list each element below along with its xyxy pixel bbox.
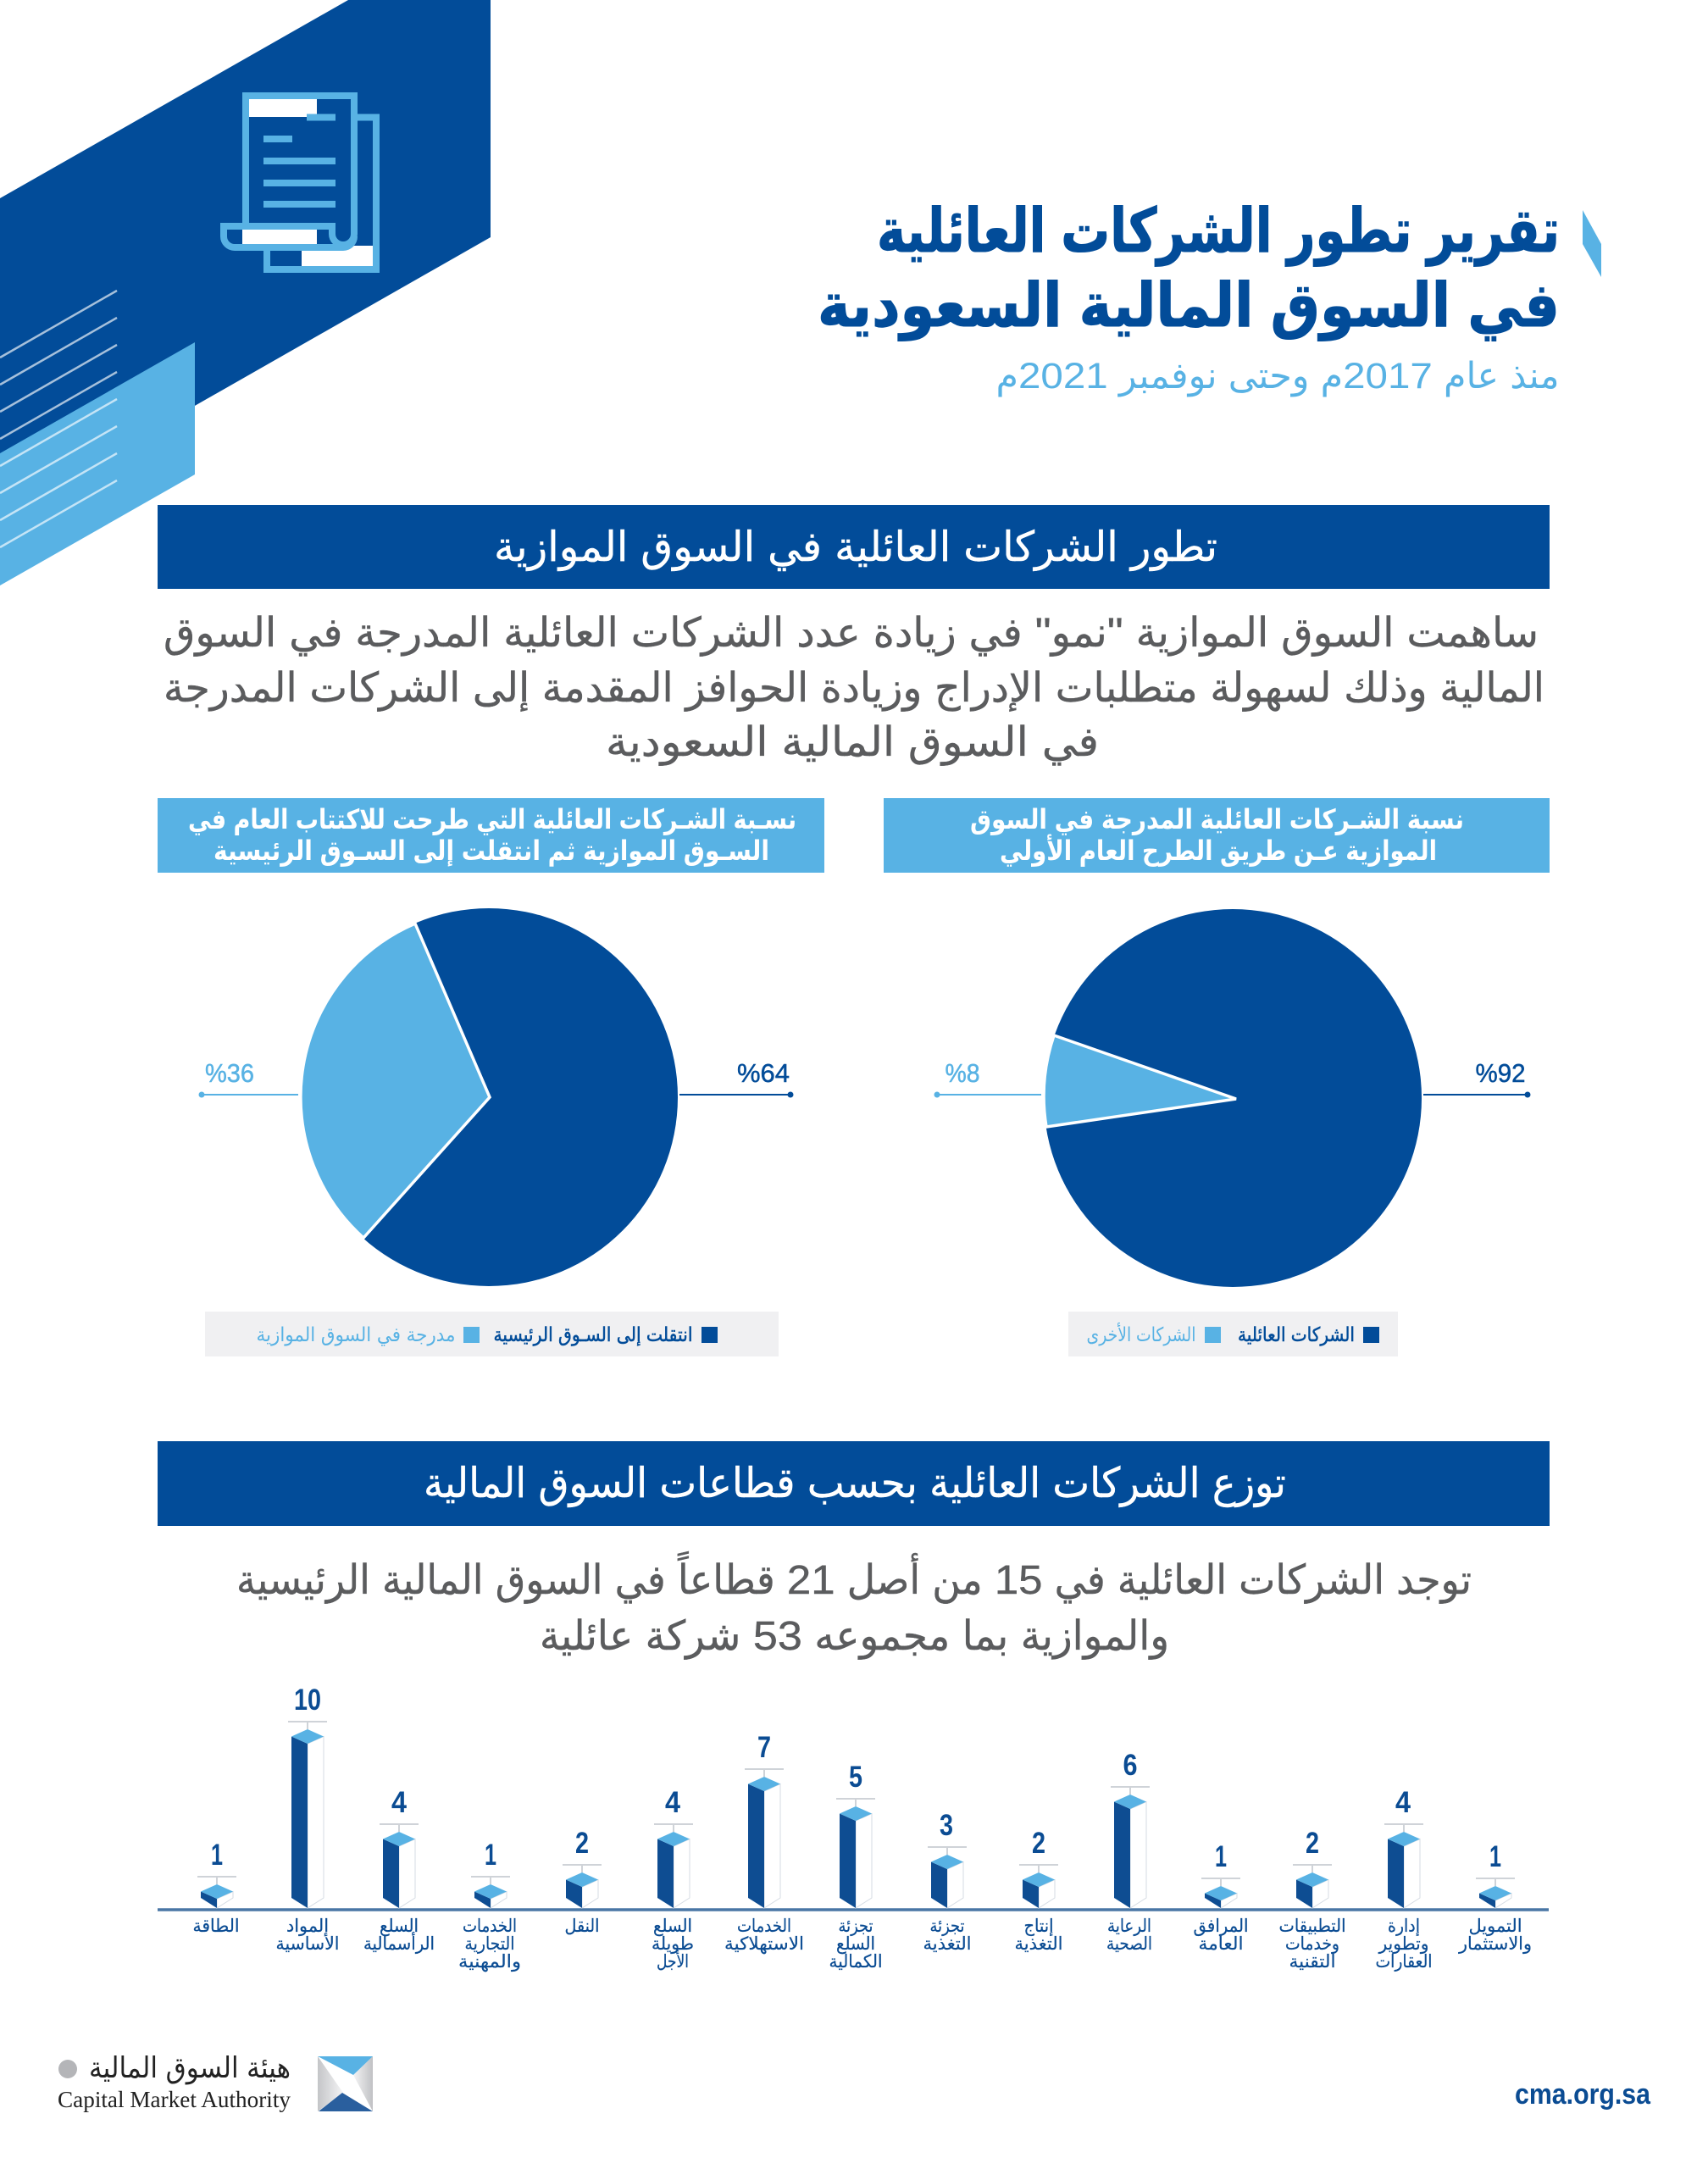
bar: food retail 3 <box>923 1809 971 1954</box>
intro paragraph: ساهمت السوق الموازية "نمو" في زيادة عدد الشركات العائلية المدرجة في السوق <box>164 611 1539 657</box>
bar: real estate 4: 4 <box>1395 1786 1411 1819</box>
sector paragraph <box>236 1550 1472 1660</box>
logo: Capital Market Authority: هيئة السوق المالية <box>89 2052 291 2085</box>
title: تقرير تطور الشركات العائلية <box>877 197 1560 267</box>
bar: food retail 3: التغذية <box>923 1934 971 1954</box>
bar: consumer services 7: الخدمات <box>737 1917 791 1936</box>
title accent <box>1583 210 1601 277</box>
label: 92 percent: %92 <box>1476 1058 1525 1088</box>
panel heading: moved to main market <box>158 798 824 873</box>
label: 36 percent <box>198 1058 298 1098</box>
sector paragraph: توجد الشركات العائلية في 15 من أصل 21 قطاعاً في السوق المالية الرئيسية <box>236 1550 1472 1604</box>
bar: materials 10: الأساسية <box>276 1933 339 1954</box>
bar: durable goods 4 <box>652 1786 694 1972</box>
section header: sectors: توزع الشركات العائلية بحسب قطاعات السوق المالية <box>424 1461 1286 1507</box>
bar: capital goods 4 <box>363 1786 435 1954</box>
intro paragraph: المالية وذلك لسهولة متطلبات الإدراج وزيادة الحوافز المقدمة إلى الشركات المدرجة <box>164 666 1544 712</box>
bar: software 2 <box>1279 1827 1345 1972</box>
logo: Capital Market Authority <box>58 2052 373 2112</box>
intro paragraph <box>164 611 1544 766</box>
decorative banner with document icon <box>0 0 491 585</box>
bar: real estate 4: العقارات <box>1376 1952 1432 1972</box>
bar: commercial services 1: والمهنية <box>458 1952 521 1972</box>
bar: luxury retail 5 <box>829 1761 883 1972</box>
section header: parallel market <box>158 505 1550 589</box>
panel heading: moved to main market: السـوق الموازية ثم انتقلت إلى السـوق الرئيسية <box>214 835 769 868</box>
bar: materials 10: المواد <box>286 1917 329 1936</box>
bar: software 2: 2 <box>1306 1827 1319 1860</box>
bar: food production 2: التغذية <box>1015 1934 1062 1954</box>
bar: materials 10: 10 <box>294 1684 321 1717</box>
bar: real estate 4: وتطوير <box>1378 1934 1428 1954</box>
bar: food retail 3: 3 <box>940 1809 953 1842</box>
legend: left pie: انتقلت إلى السـوق الرئيسية <box>493 1323 693 1346</box>
bar: health care 6: الرعاية <box>1107 1917 1151 1936</box>
website link: cma.org.sa <box>1515 2078 1651 2111</box>
bar: health care 6 <box>1106 1749 1152 1954</box>
bar: commercial services 1 <box>458 1839 521 1972</box>
title <box>818 197 1560 341</box>
bar: capital goods 4: 4 <box>391 1786 407 1819</box>
logo: Capital Market Authority: Capital Market Authority <box>58 2087 291 2112</box>
bar: food retail 3: تجزئة <box>930 1917 964 1936</box>
bar: transport 2: 2 <box>575 1827 589 1860</box>
panel heading: listed through IPO: نسبة الشـركات العائلية المدرجة في السوق <box>970 804 1464 835</box>
pie chart: moved to main market <box>198 908 793 1286</box>
legend: left pie <box>205 1312 779 1356</box>
bar: utilities 1: المرافق <box>1193 1917 1249 1936</box>
label: 64 percent: %64 <box>737 1058 790 1088</box>
legend: right pie: الشركات الأخرى <box>1086 1323 1196 1346</box>
subtitle: منذ عام 2017م وحتى نوفمبر 2021م <box>996 356 1559 397</box>
pie chart: listed through IPO <box>934 909 1530 1287</box>
intro paragraph: في السوق المالية السعودية <box>606 720 1099 766</box>
bar: durable goods 4: طويلة <box>652 1934 694 1954</box>
bar: food production 2: 2 <box>1032 1827 1045 1860</box>
bar: capital goods 4: السلع <box>380 1917 419 1936</box>
bar: finance 1: والاستثمار <box>1458 1934 1532 1954</box>
title: في السوق المالية السعودية <box>818 272 1560 341</box>
bar: health care 6: 6 <box>1123 1749 1137 1782</box>
bar: software 2: وخدمات <box>1285 1934 1339 1954</box>
panel heading: listed through IPO: الموازية عـن طريق الطرح العام الأولي <box>1000 834 1437 867</box>
bar: luxury retail 5: 5 <box>849 1761 862 1794</box>
bar: utilities 1 <box>1193 1840 1249 1954</box>
bar: durable goods 4: 4 <box>665 1786 680 1819</box>
bar: commercial services 1: الخدمات <box>463 1917 517 1936</box>
bar: finance 1: 1 <box>1489 1840 1501 1873</box>
bar: luxury retail 5: تجزئة <box>839 1917 873 1936</box>
bar: software 2: التقنية <box>1289 1952 1335 1972</box>
section header: sectors <box>158 1441 1550 1526</box>
bar: real estate 4 <box>1376 1786 1432 1972</box>
bar: food production 2: إنتاج <box>1023 1917 1054 1937</box>
bar: capital goods 4: الرأسمالية <box>363 1932 435 1954</box>
bar: real estate 4: إدارة <box>1388 1917 1420 1937</box>
bar chart <box>158 1684 1549 1972</box>
bar: energy 1: الطاقة <box>193 1917 239 1936</box>
bar: transport 2 <box>563 1827 602 1936</box>
bar: energy 1: 1 <box>211 1839 223 1872</box>
bar: finance 1 <box>1458 1840 1532 1954</box>
bar: transport 2: النقل <box>564 1917 600 1936</box>
label: 64 percent <box>679 1058 793 1098</box>
bar: durable goods 4: الأجل <box>657 1950 689 1972</box>
panel heading: listed through IPO <box>884 798 1550 873</box>
label: 8 percent <box>934 1058 1041 1098</box>
icon: document <box>224 96 376 269</box>
bar: consumer services 7: الاستهلاكية <box>724 1934 804 1954</box>
legend: left pie: مدرجة في السوق الموازية <box>256 1323 456 1346</box>
label: 92 percent <box>1423 1058 1530 1098</box>
label: 36 percent: %36 <box>205 1058 254 1088</box>
bar: durable goods 4: السلع <box>653 1917 692 1936</box>
section header: parallel market: تطور الشركات العائلية في السوق الموازية <box>494 524 1217 571</box>
bar: food production 2 <box>1015 1827 1062 1954</box>
bar: energy 1 <box>193 1839 239 1936</box>
panel heading: moved to main market: نسـبة الشـركات العائلية التي طرحت للاكتتاب العام في <box>188 804 796 835</box>
bar: luxury retail 5: السلع <box>836 1934 875 1954</box>
bar: luxury retail 5: الكمالية <box>829 1952 883 1972</box>
label: 8 percent: %8 <box>946 1058 979 1088</box>
legend: right pie <box>1068 1312 1398 1356</box>
bar: materials 10 <box>276 1684 339 1954</box>
bar: health care 6: الصحية <box>1106 1934 1152 1954</box>
legend: right pie: الشركات العائلية <box>1238 1323 1355 1346</box>
bar: consumer services 7 <box>724 1731 804 1954</box>
bar: finance 1: التمويل <box>1469 1917 1522 1936</box>
bar: commercial services 1: التجارية <box>464 1934 515 1954</box>
bar: consumer services 7: 7 <box>757 1731 771 1764</box>
sector paragraph: والموازية بما مجموعه 53 شركة عائلية <box>540 1614 1169 1660</box>
bar: utilities 1: 1 <box>1215 1840 1227 1873</box>
bar: commercial services 1: 1 <box>485 1839 496 1872</box>
bar: utilities 1: العامة <box>1198 1934 1244 1954</box>
bar: software 2: التطبيقات <box>1279 1917 1345 1936</box>
